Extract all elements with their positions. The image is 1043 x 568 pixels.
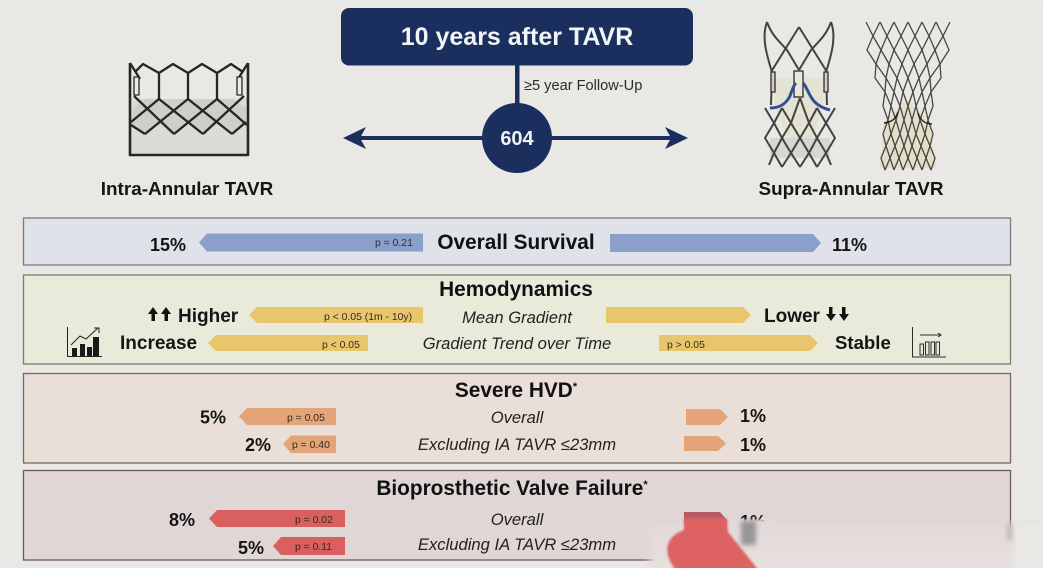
- value 1%: 1%: [740, 435, 766, 455]
- label: Gradient Trend over Time: Gradient Trend over Time: [423, 334, 611, 353]
- label: Overall: Overall: [491, 510, 545, 529]
- label: Stable: Stable: [835, 332, 891, 353]
- bar: overall left: p = 0.05: [287, 413, 325, 424]
- bar: overall left: [239, 408, 336, 425]
- label: Excluding IA TAVR 23mm: Excluding IA TAVR ≤23mm: [418, 435, 616, 454]
- label: Excluding IA TAVR 23mm: Excluding IA TAVR ≤23mm: [418, 535, 616, 554]
- heading: Bioprosthetic Valve Failure: *: [643, 479, 648, 491]
- arrow: right to supra-annular: [548, 127, 688, 149]
- header box: 10 years after TAVR: [341, 8, 693, 66]
- patient count circle: 604: [482, 103, 552, 173]
- bar: overall right: [686, 409, 728, 425]
- panel: overall survival: [24, 218, 1010, 265]
- label: Supra-Annular TAVR: Supra-Annular TAVR: [758, 179, 944, 200]
- bar: mean gradient left: [249, 307, 423, 323]
- smudge: erased lower-right area: [650, 519, 1043, 568]
- label: Lower: Lower: [764, 306, 821, 327]
- icon: stable bar chart: [912, 327, 946, 357]
- icon: increasing bar chart: [68, 327, 102, 356]
- value 5%: 5%: [200, 408, 226, 428]
- bar: gradient trend right: p > 0.05: [667, 340, 705, 351]
- bar: excluding left: [283, 436, 336, 453]
- panel: hemodynamics: [24, 275, 1010, 364]
- label: Overall: Overall: [491, 408, 545, 427]
- icon: supra-annular valve, lattice frame: [866, 22, 950, 170]
- bar: excluding left: [273, 537, 345, 555]
- right value 11%: 11%: [832, 235, 867, 255]
- icon: intra-annular valve: [130, 63, 248, 155]
- bar: gradient trend right: [659, 335, 818, 351]
- bar: mean gradient left: p < 0.05 (1m - 10y): [324, 312, 412, 323]
- right bar: [610, 234, 821, 252]
- bar: excluding right: [684, 436, 726, 451]
- heading: Severe HVD: *: [573, 381, 578, 393]
- left value 15%: 15%: [150, 235, 186, 255]
- heading: Overall Survival: Overall Survival: [437, 231, 595, 254]
- bar: gradient trend left: [208, 335, 368, 351]
- panel: bioprosthetic valve failure: [24, 470, 1010, 560]
- heading: Severe HVD: Severe HVD: [455, 379, 573, 402]
- panel: severe HVD: [24, 374, 1010, 463]
- label: Higher: Higher: [178, 306, 239, 327]
- bar: overall left: [209, 510, 345, 527]
- icon: supra-annular valve, self-expanding with post: [765, 22, 835, 167]
- label: Increase: Increase: [120, 333, 197, 354]
- value 2%: 2%: [245, 435, 271, 455]
- header box: 10 years after TAVR: 10 years after TAVR: [401, 23, 633, 51]
- connector line: [515, 65, 520, 105]
- bar: overall right: [684, 512, 727, 530]
- bar: overall left: p = 0.02: [295, 515, 333, 526]
- left bar with p value: p = 0.21: [375, 238, 413, 249]
- label: Mean Gradient: Mean Gradient: [462, 308, 573, 327]
- value 8%: 8%: [169, 510, 195, 530]
- bar: mean gradient right: [606, 307, 751, 323]
- bar: excluding left: p = 0.11: [295, 542, 332, 553]
- label: Intra-Annular TAVR: Intra-Annular TAVR: [101, 179, 274, 200]
- follow-up label: ≥5 year Follow-Up: [524, 78, 642, 94]
- up arrows: [148, 307, 171, 321]
- value 1%: 1%: [740, 512, 766, 532]
- value 5%: 5%: [238, 538, 264, 558]
- bar: gradient trend left: p < 0.05: [322, 340, 360, 351]
- heading: Hemodynamics: Hemodynamics: [439, 278, 593, 301]
- arrow: left to intra-annular: [343, 127, 488, 149]
- value 1%: 1%: [740, 406, 766, 426]
- left bar with p value: [199, 234, 423, 252]
- heading: Bioprosthetic Valve Failure: Bioprosthetic Valve Failure: [376, 477, 643, 500]
- patient count circle: 604: 604: [500, 128, 535, 150]
- down arrows: [826, 307, 849, 321]
- bar: excluding left: p = 0.40: [292, 440, 330, 451]
